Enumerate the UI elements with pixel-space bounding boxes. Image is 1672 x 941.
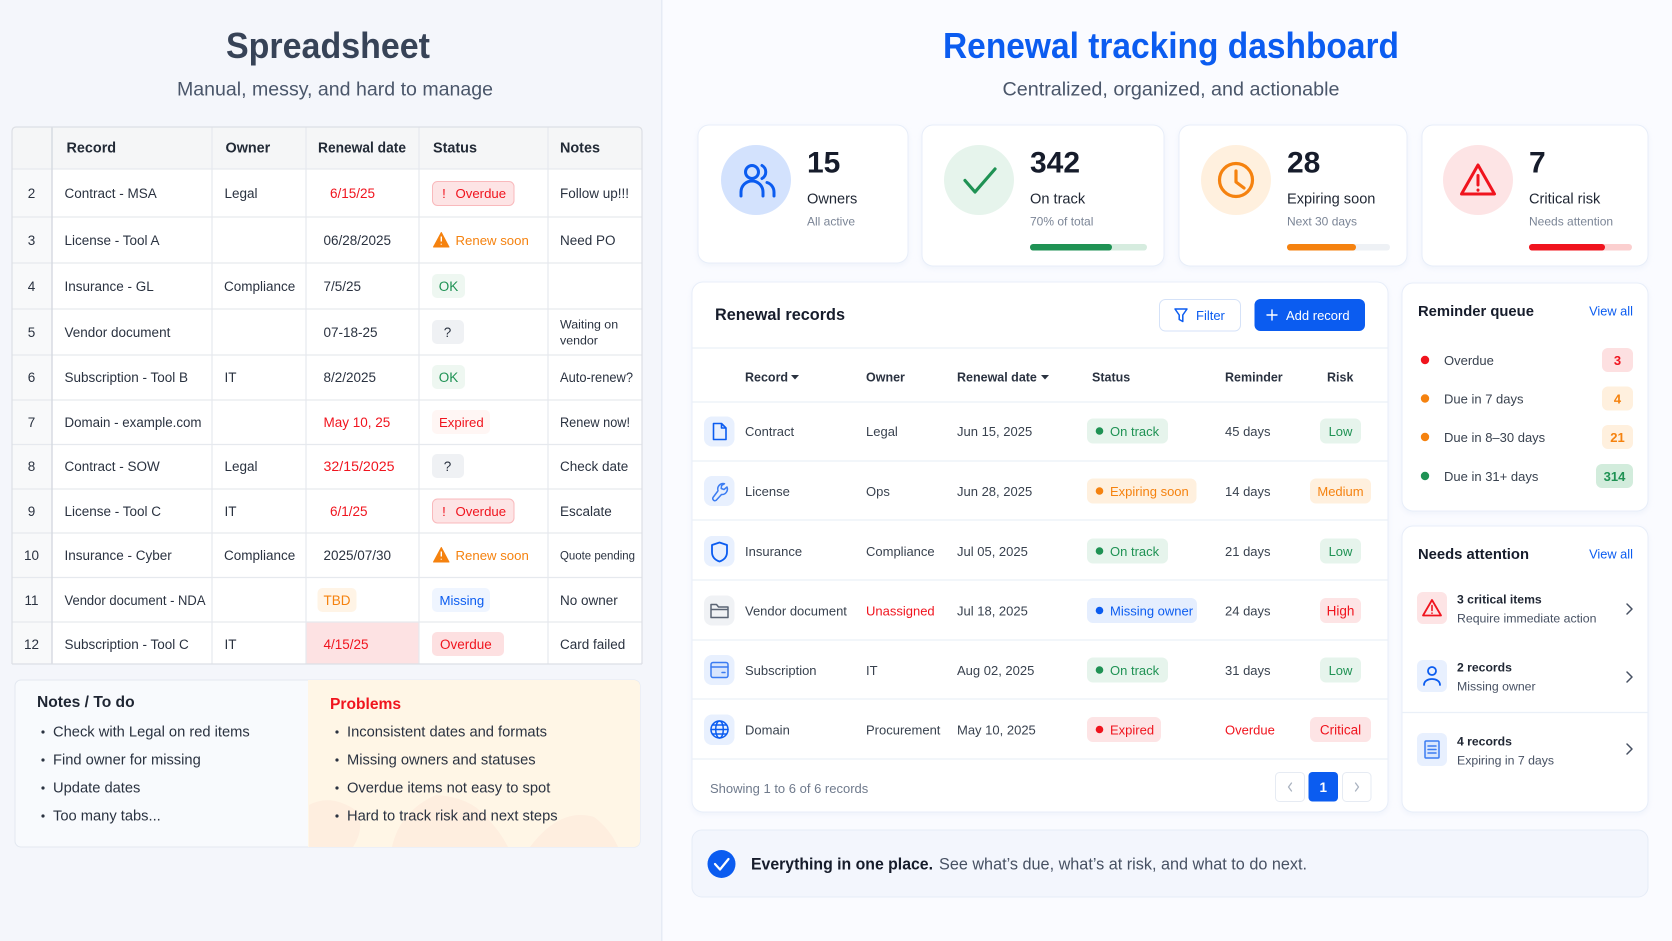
record: domain: Expired (1110, 723, 1154, 738)
queue: due in 31+ days: Due in 31+ days (1444, 469, 1539, 484)
record: contract: Legal (866, 424, 898, 439)
row 9 (28, 499, 612, 523)
KPI card: critical risk (1422, 125, 1648, 266)
heading: Renewal records: Renewal records (715, 305, 845, 324)
link: view all: View all (1589, 547, 1633, 562)
row 5: Vendor document (64, 325, 171, 340)
heading: Notes / To do: Notes / To do (37, 694, 135, 711)
row 7: Renew now! (560, 415, 630, 430)
KPI card: owners: 15 (807, 147, 840, 180)
record: contract: Jun 15, 2025 (957, 424, 1032, 439)
row 3: License - Tool A (64, 233, 160, 248)
row 9: License - Tool C (64, 504, 161, 519)
KPI card: expiring soon: 28 (1287, 147, 1320, 180)
row 12 (24, 632, 625, 656)
row 7: Expired (439, 415, 484, 430)
row 11: 11 (24, 593, 39, 608)
row 2: Contract - MSA (64, 186, 157, 201)
row 9: Overdue (456, 504, 506, 519)
record: vendor document: 24 days (1225, 604, 1271, 619)
record: subscription: Aug 02, 2025 (957, 663, 1034, 678)
record: vendor document: Vendor document (745, 604, 847, 619)
heading: Needs attention: Needs attention (1418, 547, 1529, 563)
record: insurance: Jul 05, 2025 (957, 544, 1028, 559)
list: problems: Inconsistent dates and formats (347, 725, 547, 741)
queue: due in 31+ days: 314 (1604, 469, 1626, 484)
record: domain: May 10, 2025 (957, 723, 1036, 738)
row 2: Overdue (456, 186, 506, 201)
row 7 (28, 410, 630, 434)
queue: due in 7 days: 4 (1614, 392, 1622, 407)
record: subscription: IT (866, 663, 878, 678)
spreadsheet table (12, 127, 642, 664)
record: insurance: 21 days (1225, 544, 1271, 559)
record: vendor document: Unassigned (866, 604, 935, 619)
row 8: Contract - SOW (64, 459, 160, 474)
record: license: License (745, 484, 790, 499)
list: problems: Missing owners and statuses (347, 753, 536, 769)
progress bar: critical risk (1529, 244, 1632, 250)
queue: due in 7 days (1421, 386, 1633, 410)
row 6: Subscription - Tool B (64, 370, 188, 385)
icon: clock (1201, 145, 1271, 215)
row 11: Missing (440, 593, 484, 608)
queue: due in 31+ days (1421, 464, 1633, 488)
queue: due in 8-30 days: Due in 8–30 days (1444, 430, 1546, 445)
row 5: ? (444, 325, 451, 340)
row 7: May 10, 25 (324, 415, 390, 430)
KPI card: on track: On track (1030, 192, 1086, 208)
item: critical: 3 critical items (1457, 593, 1542, 607)
heading: Reminder queue: Reminder queue (1418, 304, 1534, 320)
queue: due in 7 days: Due in 7 days (1444, 392, 1524, 407)
callout: everything in one place: Everything in one place. (751, 856, 933, 874)
item: critical (1417, 592, 1632, 626)
table header: records: Renewal date (957, 371, 1037, 385)
row 7: 7 (28, 415, 35, 430)
KPI card: on track (922, 125, 1164, 266)
row 12: 12 (24, 637, 39, 652)
row 10 (24, 548, 635, 563)
row 7: Domain - example.com (64, 415, 202, 430)
record: contract (704, 416, 1361, 446)
record: insurance: Compliance (866, 544, 935, 559)
record: license: Medium (1317, 484, 1364, 499)
row 5: 5 (28, 325, 35, 340)
record: license: 14 days (1225, 484, 1271, 499)
record: vendor document: High (1327, 604, 1354, 619)
record: contract: Contract (745, 424, 795, 439)
row 8: 8 (28, 459, 35, 474)
record: license (704, 476, 1371, 506)
subtitle: dashboard: Centralized, organized, and actionable (1002, 79, 1340, 101)
row 2 (28, 182, 629, 206)
record: contract: On track (1110, 424, 1160, 439)
record: insurance (704, 536, 1361, 566)
pagination controls: 1 (1319, 780, 1327, 795)
row 6: IT (224, 370, 236, 385)
queue: due in 8-30 days: 21 (1610, 430, 1625, 445)
row 2: ! (442, 186, 446, 201)
title: Renewal tracking dashboard: Renewal tracking dashboard (943, 25, 1399, 66)
row 6: 8/2/2025 (324, 370, 376, 385)
list: notes: Too many tabs... (53, 809, 161, 825)
record: subscription: 31 days (1225, 663, 1271, 678)
row 12: Overdue (440, 637, 492, 652)
item: missing owner (1417, 660, 1632, 694)
record: contract: Low (1329, 424, 1353, 439)
row 4: 7/5/25 (324, 279, 361, 294)
row 11: Vendor document - NDA (64, 593, 206, 608)
button: add record (1254, 299, 1365, 331)
row 10: Quote pending (560, 549, 635, 563)
record: contract: 45 days (1225, 424, 1271, 439)
row 12: Subscription - Tool C (64, 637, 189, 652)
row 8: 32/15/2025 (324, 459, 394, 474)
icon: check (944, 145, 1014, 215)
row 2: Follow up!!! (560, 186, 629, 201)
record: insurance: On track (1110, 544, 1160, 559)
KPI card: critical risk: Critical risk (1529, 192, 1601, 208)
row 4: OK (439, 279, 458, 294)
row 9: IT (224, 504, 236, 519)
row 4 (28, 274, 465, 298)
row 12: 4/15/25 (324, 637, 369, 652)
link: view all: View all (1589, 304, 1633, 319)
row 6: Auto-renew? (560, 370, 633, 385)
row 9: Escalate (560, 504, 612, 519)
table header row: Notes (560, 141, 600, 157)
progress bar: on track (1030, 244, 1147, 250)
icon: people (721, 145, 791, 215)
table header row: Record (66, 141, 116, 157)
panel: needs attention (1402, 526, 1648, 812)
table header: records: Owner (866, 371, 905, 385)
row 9: 9 (28, 504, 35, 519)
panel: spreadsheet side (0, 0, 662, 941)
pagination controls (1276, 772, 1371, 802)
item: critical: Require immediate action (1457, 612, 1597, 626)
list: notes: Check with Legal on red items (53, 725, 250, 741)
button: filter (1160, 300, 1240, 331)
record: insurance: Insurance (745, 544, 802, 559)
row 4: Compliance (224, 279, 295, 294)
list: problems (335, 725, 558, 825)
record: subscription (704, 655, 1361, 685)
table header: records: Status (1092, 371, 1130, 385)
KPI card: on track: 342 (1030, 147, 1080, 180)
row 2: 6/15/25 (330, 186, 375, 201)
callout: everything in one place: See what’s due, what’s at risk, and what to do next. (939, 856, 1307, 874)
record: license: Expiring soon (1110, 484, 1189, 499)
row 11: No owner (560, 593, 618, 608)
table header row (66, 141, 600, 157)
row 6: OK (439, 370, 458, 385)
row 3: 3 (28, 233, 35, 248)
KPI card: expiring soon: Expiring soon (1287, 192, 1375, 208)
row 9: ! (442, 504, 446, 519)
record: domain: Domain (745, 723, 790, 738)
record: domain (704, 714, 1371, 745)
button: filter: Filter (1196, 308, 1226, 323)
record: vendor document: Missing owner (1110, 604, 1194, 619)
subtitle: spreadsheet: Manual, messy, and hard to manage (177, 79, 493, 101)
list: notes (41, 725, 250, 825)
row 3: Renew soon (456, 233, 529, 248)
KPI card: owners (698, 125, 908, 263)
row 10: 2025/07/30 (324, 548, 391, 563)
row 8: Check date (560, 459, 628, 474)
queue: overdue (1421, 348, 1633, 372)
row 5 (28, 318, 618, 348)
row 12: Card failed (560, 637, 625, 652)
record: domain: Procurement (866, 723, 941, 738)
button: add record: Add record (1286, 308, 1350, 323)
panel: reminder queue (1402, 283, 1648, 511)
record: domain: Overdue (1225, 723, 1275, 738)
progress bar: expiring soon (1287, 244, 1390, 250)
record: domain: Critical (1320, 723, 1361, 738)
title: Spreadsheet: Spreadsheet (226, 25, 430, 66)
row 5: 07-18-25 (324, 325, 378, 340)
item: missing owner: Missing owner (1457, 680, 1536, 694)
table header: records (745, 371, 1353, 385)
queue: due in 8-30 days (1421, 425, 1633, 449)
callout: everything in one place (692, 830, 1648, 897)
table header: records: Reminder (1225, 371, 1283, 385)
row 3 (28, 232, 616, 248)
record: insurance: Low (1329, 544, 1353, 559)
row 10: Renew soon (456, 548, 529, 563)
row 12: IT (224, 637, 236, 652)
record: subscription: Subscription (745, 663, 817, 678)
KPI card: on track: 70% of total (1030, 215, 1093, 229)
list: notes: Update dates (53, 781, 140, 797)
row 4: Insurance - GL (64, 279, 154, 294)
KPI card: expiring soon: Next 30 days (1287, 215, 1357, 229)
item: missing owner: 2 records (1457, 661, 1512, 675)
item: expiring: Expiring in 7 days (1457, 754, 1554, 768)
KPI card: owners: All active (807, 215, 855, 229)
heading: Problems: Problems (330, 696, 401, 713)
record: vendor document: Jul 18, 2025 (957, 604, 1028, 619)
row 5: vendor (560, 334, 598, 348)
panel: notes and to do (15, 680, 640, 847)
row 4: 4 (28, 279, 36, 294)
row 8: ? (444, 459, 451, 474)
list: notes: Find owner for missing (53, 753, 201, 769)
row 11 (24, 588, 618, 612)
KPI card: owners: Owners (807, 192, 857, 208)
list: problems: Hard to track risk and next steps (347, 809, 558, 825)
list: problems: Overdue items not easy to spot (347, 781, 550, 797)
queue: overdue: 3 (1614, 353, 1621, 368)
row 10: Compliance (224, 548, 295, 563)
item: expiring (1417, 733, 1632, 768)
row 8 (28, 454, 628, 478)
queue: overdue: Overdue (1444, 353, 1494, 368)
row 10: Insurance - Cyber (64, 548, 172, 563)
row 11: TBD (324, 593, 351, 608)
record: subscription: On track (1110, 663, 1160, 678)
table header row: Owner (226, 141, 271, 157)
item: expiring: 4 records (1457, 735, 1512, 749)
record: subscription: Low (1329, 663, 1353, 678)
icon: warning (1443, 145, 1513, 215)
row 10: 10 (24, 548, 39, 563)
row 3: 06/28/2025 (324, 233, 391, 248)
row 5: Waiting on (560, 318, 618, 332)
row 6: 6 (28, 370, 35, 385)
row 8: Legal (224, 459, 258, 474)
table header: records: Record (745, 371, 788, 385)
record: vendor document (704, 596, 1361, 626)
icon: blue check (708, 850, 736, 878)
table header row: Status (433, 141, 477, 157)
KPI card: expiring soon (1179, 125, 1407, 266)
panel: problems (308, 680, 640, 847)
panel: renewal records (692, 282, 1388, 812)
row 9: 6/1/25 (330, 504, 368, 519)
row 2: 2 (28, 186, 35, 201)
row 6 (28, 365, 633, 389)
row 2: Legal (224, 186, 258, 201)
table header row: Renewal date (318, 141, 406, 157)
record: license: Ops (866, 484, 890, 499)
pagination summary: Showing 1 to 6 of 6 records (710, 781, 869, 796)
KPI card: critical risk: 7 (1529, 147, 1546, 180)
row 3: Need PO (560, 233, 616, 248)
KPI card: critical risk: Needs attention (1529, 215, 1613, 229)
table header: records: Risk (1327, 371, 1353, 385)
record: license: Jun 28, 2025 (957, 484, 1032, 499)
